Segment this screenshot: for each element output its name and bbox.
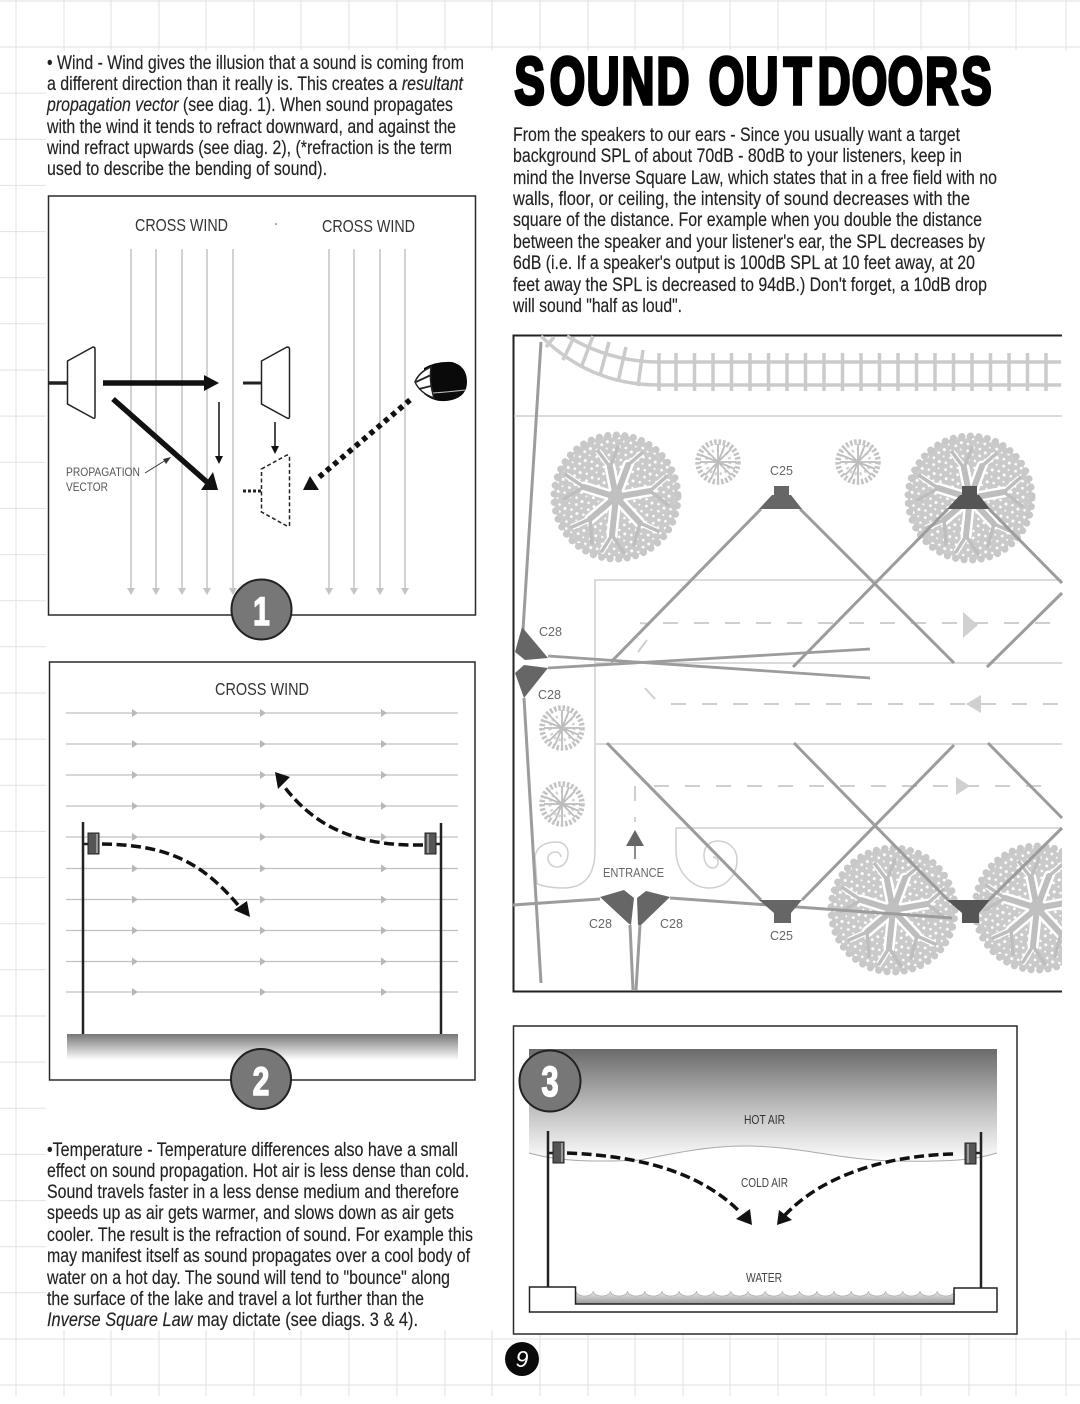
arrow: upward refraction <box>275 772 423 845</box>
text block: temperature <box>46 1139 473 1331</box>
page number <box>505 1342 539 1376</box>
small tree <box>698 442 738 482</box>
text block: temperature: the surface of the lake and travel a lot further than the <box>47 1288 424 1310</box>
label: propagation vector: PROPAGATION <box>66 465 140 479</box>
entrance arrow and label: ENTRANCE <box>603 866 664 880</box>
speaker apparent position <box>243 455 290 526</box>
label: propagation vector <box>66 465 140 494</box>
arrow: wind shift right <box>271 422 279 454</box>
text block: wind: wind refract upwards (see diag. 2), (*refraction is the term <box>46 137 452 159</box>
badge 3 <box>520 1050 580 1112</box>
text block: wind: propagation vector (see diag. 1). When sound propagates <box>46 94 453 116</box>
speaker C25 top: C25 <box>770 464 793 478</box>
icon: listener head <box>415 362 467 401</box>
small tree left lower <box>542 784 582 824</box>
text block: wind: with the wind it tends to refract downward, and against the <box>46 116 456 138</box>
badge 2 <box>231 1049 291 1109</box>
speaker C28 left lower: C28 <box>538 688 561 702</box>
text block: wind: used to describe the bending of sound). <box>47 158 327 180</box>
text block: inverse square law <box>512 124 997 317</box>
coverage lines <box>513 342 1062 990</box>
label: cross wind left: CROSS WIND <box>135 215 228 235</box>
text block: temperature: effect on sound propagation. Hot air is less dense than cold. <box>47 1160 469 1182</box>
arrow: wind shift left <box>215 402 223 464</box>
label: cross wind: CROSS WIND <box>215 679 309 699</box>
panel: diagram 2 cross wind refraction <box>50 662 475 1109</box>
label: cold air: COLD AIR <box>741 1176 788 1190</box>
ground <box>67 1034 458 1060</box>
text block: temperature: cooler. The result is the refraction of sound. For example this <box>47 1224 473 1246</box>
text block: temperature: speeds up as air gets warmer, and slows down as air gets <box>47 1202 454 1224</box>
speaker C28 bottom right: C28 <box>660 917 683 931</box>
badge 1 <box>232 580 292 640</box>
text block: inverse square law: will sound "half as loud". <box>512 295 682 317</box>
trees <box>542 435 1032 972</box>
pole right with speaker <box>965 1132 981 1288</box>
dashed lane lines <box>635 612 1062 822</box>
railway tracks <box>541 336 1061 391</box>
text block: wind <box>46 52 464 180</box>
label: propagation vector: VECTOR <box>66 480 108 494</box>
water and banks <box>530 1287 997 1312</box>
panel: diagram 1 cross wind <box>48 196 476 640</box>
arrow: leader line <box>145 457 171 473</box>
label: water: WATER <box>746 1271 782 1285</box>
entrance arrow and label <box>603 830 664 880</box>
text block: wind: a different direction than it really is. This creates a resultant <box>47 73 464 95</box>
pole right with speaker <box>425 823 441 1034</box>
air boundary <box>529 1146 997 1161</box>
hot air gradient <box>529 1049 997 1162</box>
badge 1: 1 <box>253 590 270 634</box>
speaker C25 bottom right <box>947 900 990 923</box>
speaker C28 bottom left <box>589 890 634 931</box>
speaker C25 top <box>759 464 802 509</box>
badge 3: 3 <box>541 1057 559 1105</box>
text block: temperature: •Temperature - Temperature differences also have a small <box>47 1139 458 1161</box>
text block: temperature: Inverse Square Law may dictate (see diags. 3 & 4). <box>47 1309 418 1331</box>
large tree bottom <box>831 848 955 972</box>
arrow: direct sound <box>103 375 219 391</box>
page number: 9 <box>516 1346 529 1372</box>
clipped tree bottom right <box>975 846 1080 970</box>
label: cross wind right: CROSS WIND <box>322 216 415 236</box>
speaker C28 left upper: C28 <box>539 625 562 639</box>
text block: inverse square law: between the speaker and your listener's ear, the SPL decreases by <box>513 231 985 253</box>
speaker C28 bottom right <box>637 891 683 931</box>
road outlines <box>514 416 1062 888</box>
small tree <box>838 442 878 482</box>
speaker C28 left upper <box>515 625 562 660</box>
cold air mask <box>529 1146 997 1175</box>
arrow: perceived direction <box>303 400 410 490</box>
speaker left <box>48 347 95 418</box>
speaker C25 bottom <box>759 900 802 943</box>
text block: inverse square law: 6dB (i.e. If a speaker's output is 100dB SPL at 10 feet away, at 20 <box>513 252 975 274</box>
wind arrows <box>127 249 409 595</box>
arrow: downward refraction <box>102 844 250 917</box>
speaker C28 bottom left: C28 <box>589 917 612 931</box>
pole left with speaker <box>83 822 99 1034</box>
text block: inverse square law: square of the distance. For example when you double the distance <box>513 209 982 231</box>
pole left with speaker <box>548 1131 564 1287</box>
text block: inverse square law: background SPL of about 70dB - 80dB to your listeners, keep in <box>513 145 962 167</box>
speaker C25 top right <box>947 486 990 509</box>
small tree left <box>542 708 582 748</box>
text block: temperature: may manifest itself as sound propagates over a cool body of <box>47 1245 470 1267</box>
text block: inverse square law: feet away the SPL is decreased to 94dB.) Don't forget, a 10dB drop <box>513 274 987 296</box>
speaker C25 bottom: C25 <box>770 929 793 943</box>
panel: map of speaker layout <box>513 336 1080 992</box>
label: hot air: HOT AIR <box>744 1113 785 1127</box>
text block: temperature: Sound travels faster in a less dense medium and therefore <box>47 1181 459 1203</box>
arrow: right sound path <box>777 1154 953 1225</box>
text block: wind: • Wind - Wind gives the illusion that a sound is coming from <box>47 52 464 74</box>
title: SOUND OUTDOORS <box>514 44 992 119</box>
arrow: left sound path <box>567 1153 752 1225</box>
large tree top right <box>908 436 1032 560</box>
speaker middle <box>243 347 290 418</box>
panel: diagram 3 hot and cold air over water <box>514 1026 1017 1334</box>
speaker C28 left lower <box>515 665 561 702</box>
text block: temperature: water on a hot day. The sound will tend to "bounce" along <box>46 1267 450 1289</box>
wind arrows <box>66 709 458 996</box>
text block: inverse square law: walls, floor, or ceiling, the intensity of sound decreases with the <box>512 188 970 210</box>
text block: inverse square law: From the speakers to our ears - Since you usually want a target <box>513 124 960 146</box>
arrow: propagation vector <box>113 399 218 490</box>
large tree top left <box>554 435 678 559</box>
badge 2: 2 <box>253 1060 269 1104</box>
